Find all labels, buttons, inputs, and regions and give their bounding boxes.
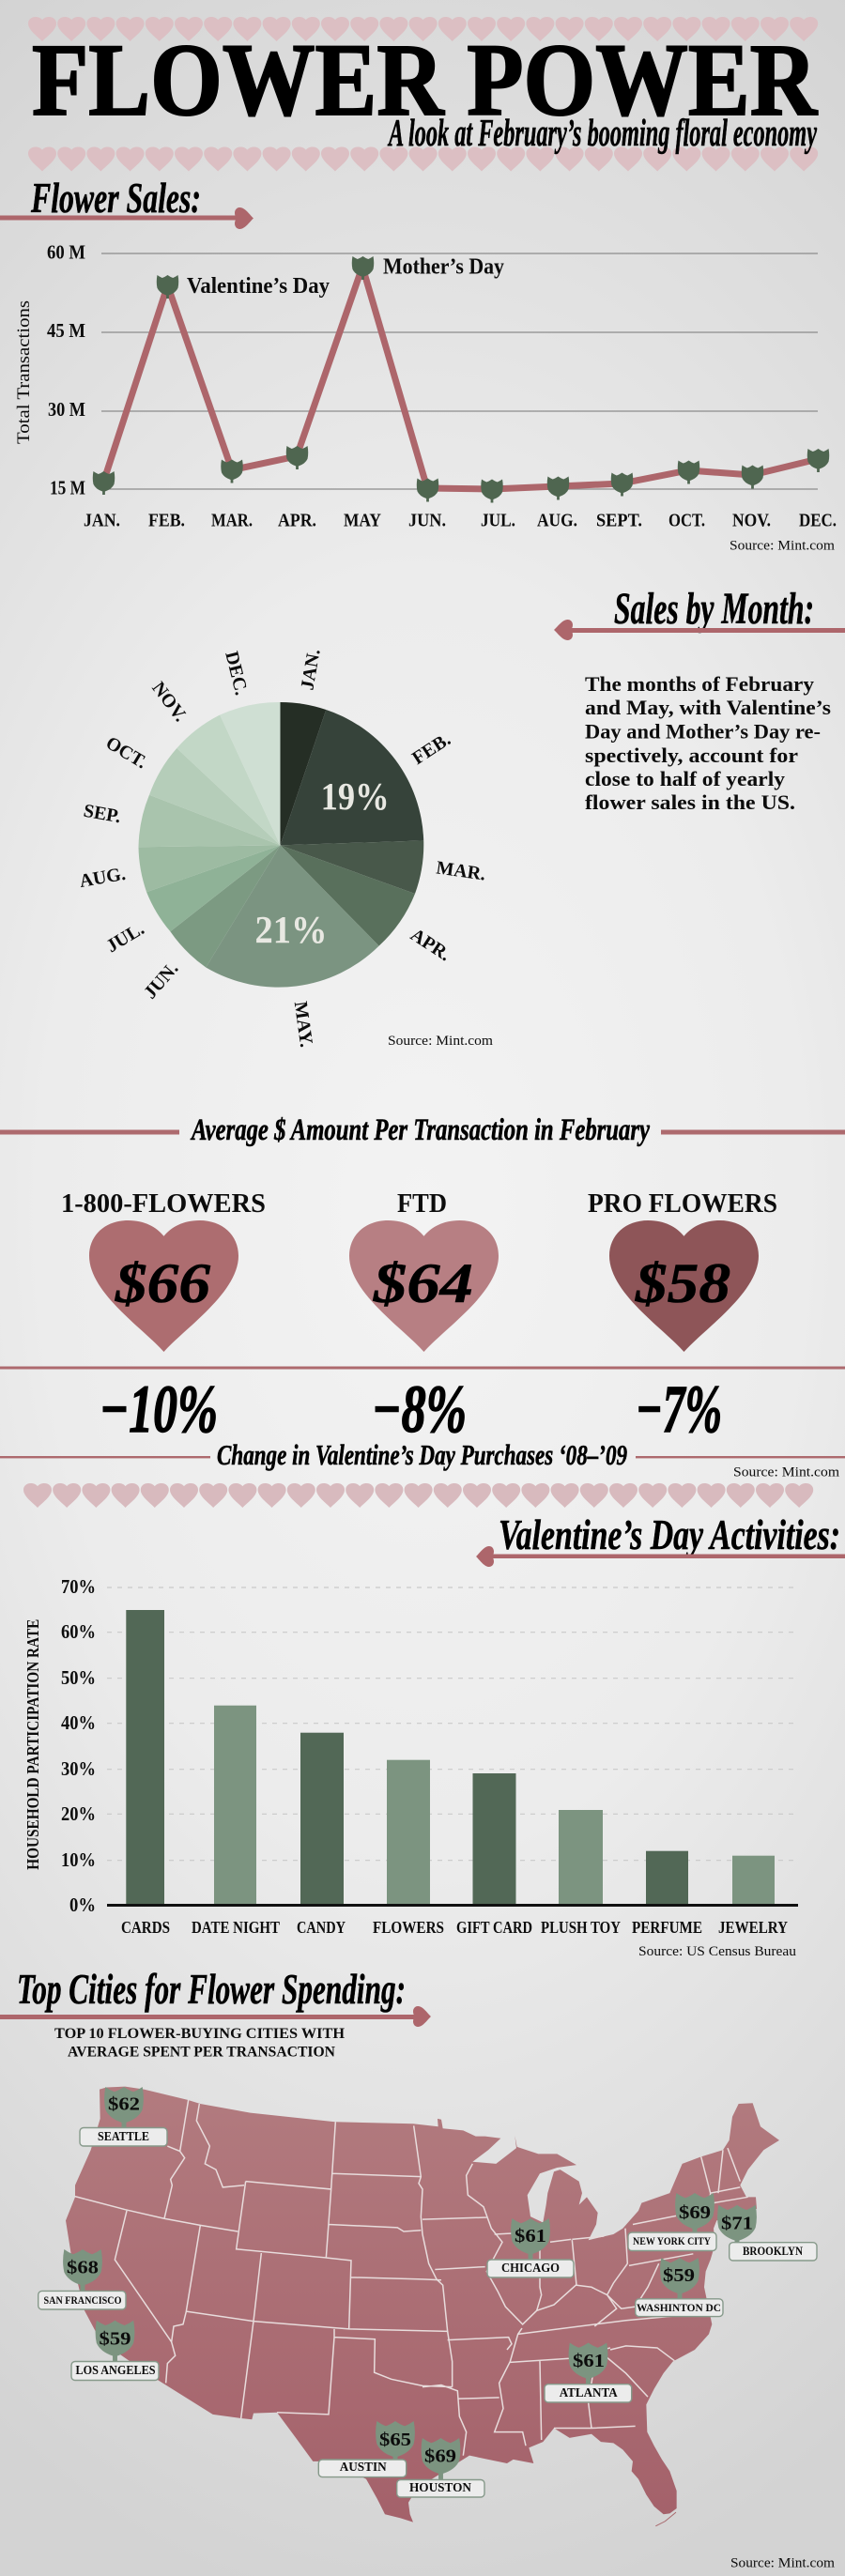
marker: San Francisco (38, 2249, 126, 2309)
arrow: Top Cities (0, 2006, 431, 2027)
text block: sales by month explanation: flower sales in the US. (585, 790, 795, 814)
pie chart: sales by month: APR. (407, 925, 454, 965)
pie chart: sales by month: 19% (321, 774, 390, 818)
bar chart: Valentine's Day activities: 50% (61, 1666, 96, 1689)
brand: 1-800-Flowers: 1-800-FLOWERS (61, 1189, 266, 1219)
pie chart: sales by month: DEC. (221, 650, 252, 698)
line chart: flower sales by month (14, 240, 837, 531)
brand: FTD: FTD (397, 1189, 447, 1219)
text block: sales by month explanation: Day and Mother’s Day re- (585, 719, 821, 744)
pie chart: sales by month: AUG. (78, 864, 127, 892)
map subtitle: AVERAGE SPENT PER TRANSACTION (68, 2045, 335, 2060)
heading: Flower Sales: Flower Sales: (30, 174, 201, 222)
marker: Brooklyn (717, 2205, 817, 2261)
marker: Austin: AUSTIN (340, 2460, 387, 2474)
marker: Chicago: $61 (515, 2226, 546, 2246)
source: transaction panel: Source: Mint.com (733, 1464, 839, 1480)
marker: Chicago (487, 2218, 574, 2277)
source: sales chart: Source: Mint.com (730, 539, 835, 554)
bar chart: Valentine's Day activities: 70% (61, 1575, 96, 1598)
brand: FTD: $64 (373, 1252, 473, 1314)
bar chart: Valentine's Day activities: 10% (61, 1848, 96, 1871)
pie chart: sales by month: JUN. (140, 958, 182, 1003)
pie chart: sales by month: MAY. (290, 1000, 316, 1049)
text block: sales by month explanation: spectively, account for (585, 744, 798, 767)
arrow: Flower Sales (0, 207, 254, 229)
line chart: flower sales by month: APR. (278, 511, 316, 531)
marker: Washington DC (636, 2258, 723, 2317)
marker: Brooklyn: BROOKLYN (743, 2244, 804, 2258)
brand: FTD (349, 1189, 499, 1352)
marker: San Francisco: SAN FRANCISCO (43, 2293, 122, 2307)
marker: Los Angeles: LOS ANGELES (75, 2363, 156, 2377)
line chart: flower sales by month: 60 M (47, 240, 85, 263)
marker: Houston: HOUSTON (409, 2480, 471, 2494)
marker: Seattle: SEATTLE (98, 2129, 149, 2143)
line chart: flower sales by month: JAN. (84, 511, 120, 531)
text block: sales by month explanation: close to half of yearly (585, 767, 785, 790)
line chart: flower sales by month: MAY (344, 511, 381, 531)
marker: Seattle (80, 2087, 167, 2146)
marker: Brooklyn: $71 (721, 2214, 753, 2234)
marker: Los Angeles: $59 (100, 2329, 131, 2350)
bar chart: Valentine's Day activities: GIFT CARD (456, 1918, 532, 1937)
change values (100, 1372, 722, 1447)
pie chart: sales by month: MAR. (435, 857, 487, 885)
bar chart: Valentine's Day activities: 60% (61, 1620, 96, 1643)
marker: Washington DC: WASHINTON DC (637, 2301, 721, 2314)
heading: change in purchases: Change in Valentine’s Day Purchases ‘08–’09 (217, 1438, 627, 1471)
bar chart: Valentine's Day activities: 30% (61, 1757, 96, 1780)
line chart: flower sales by month: AUG. (537, 511, 577, 531)
bar chart: Valentine's Day activities: 0% (69, 1894, 96, 1916)
pie chart: sales by month: 21% (255, 908, 327, 951)
bar chart: Valentine's Day activities: JEWELRY (718, 1918, 788, 1937)
brand: Pro Flowers (588, 1189, 777, 1352)
source: bar chart: Source: US Census Bureau (638, 1944, 797, 1959)
map subtitle (54, 2026, 346, 2060)
source: pie chart: Source: Mint.com (388, 1034, 493, 1049)
change values: −8% (372, 1372, 467, 1447)
arrow: Valentine's Day Activities (476, 1546, 845, 1567)
line chart: flower sales by month: Mother’s Day (383, 255, 504, 280)
line chart: flower sales by month: 45 M (47, 319, 85, 342)
text block: sales by month explanation (585, 672, 831, 814)
marker: Atlanta: $61 (573, 2351, 605, 2371)
line chart: flower sales by month: 30 M (48, 398, 85, 421)
brand: Pro Flowers: PRO FLOWERS (588, 1189, 777, 1219)
text block: sales by month explanation: The months of February (585, 672, 814, 696)
marker: Houston: $69 (424, 2446, 456, 2467)
source: map: Source: Mint.com (730, 2555, 835, 2570)
text block: sales by month explanation: and May, with Valentine’s (585, 696, 831, 719)
pie chart: sales by month: NOV. (147, 678, 191, 726)
marker: San Francisco: $68 (67, 2258, 99, 2278)
bar chart: Valentine's Day activities: CANDY (297, 1918, 346, 1937)
marker: New York City (628, 2193, 716, 2251)
marker: Los Angeles (71, 2321, 159, 2381)
bar chart: Valentine's Day activities: CARDS (121, 1918, 170, 1937)
line chart: flower sales by month: OCT. (668, 511, 705, 531)
heart row: under title (28, 146, 818, 171)
heart row: top (28, 17, 818, 41)
bar chart: Valentine's Day activities: HOUSEHOLD PARTICIPATION RATE (23, 1619, 42, 1870)
line chart: flower sales by month: SEPT. (596, 511, 642, 531)
brand: 1-800-Flowers: $66 (115, 1252, 210, 1314)
pie chart: sales by month: JUL. (103, 918, 148, 957)
marker: Chicago: CHICAGO (501, 2261, 560, 2275)
bar chart: Valentine's Day activities (23, 1575, 798, 1937)
marker: Austin (318, 2421, 415, 2477)
line chart: flower sales by month: NOV. (732, 511, 771, 531)
bar chart: Valentine's Day activities: FLOWERS (373, 1918, 444, 1937)
line chart: flower sales by month: Valentine’s Day (187, 274, 330, 299)
brand: 1-800-Flowers (61, 1189, 266, 1352)
marker: New York City: NEW YORK CITY (633, 2236, 712, 2247)
heart row: mid page (23, 1483, 813, 1508)
bar chart: Valentine's Day activities: 40% (61, 1711, 96, 1734)
bar chart: Valentine's Day activities: PLUSH TOY (541, 1918, 621, 1937)
pie chart: sales by month (78, 648, 487, 1049)
line chart: flower sales by month: Total Transactions (14, 300, 34, 444)
bar chart: Valentine's Day activities: 20% (61, 1802, 96, 1825)
heading: Top Cities: Top Cities for Flower Spending: (17, 1965, 406, 2013)
line chart: flower sales by month: MAR. (211, 511, 253, 531)
change values: −7% (636, 1372, 722, 1447)
marker: Atlanta: ATLANTA (560, 2385, 618, 2400)
bar chart: Valentine's Day activities: DATE NIGHT (192, 1918, 280, 1937)
change values: −10% (100, 1372, 218, 1447)
arrow: Sales by Month (554, 620, 845, 640)
marker: Atlanta (545, 2343, 632, 2402)
pie chart: sales by month: OCT. (102, 732, 150, 773)
line chart: flower sales by month: JUL. (481, 511, 515, 531)
line chart: flower sales by month: FEB. (148, 511, 185, 531)
marker: Seattle: $62 (108, 2094, 140, 2115)
map: United States (66, 2087, 779, 2526)
pie chart: sales by month: FEB. (408, 729, 454, 769)
map subtitle: TOP 10 FLOWER-BUYING CITIES WITH (54, 2026, 346, 2042)
pie chart: sales by month: SEP. (82, 801, 122, 827)
marker: Washington DC: $59 (663, 2265, 695, 2286)
pie chart: sales by month: JAN. (297, 648, 325, 692)
marker: New York City: $69 (679, 2202, 711, 2223)
marker: Austin: $65 (379, 2430, 411, 2450)
line chart: flower sales by month: JUN. (408, 511, 446, 531)
marker: Houston (397, 2438, 484, 2497)
line chart: flower sales by month: DEC. (799, 511, 837, 531)
brand: Pro Flowers: $58 (635, 1252, 730, 1314)
line chart: flower sales by month: 15 M (50, 477, 85, 499)
heading: average transaction: Average $ Amount Per Transaction in February (191, 1113, 650, 1147)
bar chart: Valentine's Day activities: PERFUME (632, 1918, 702, 1937)
